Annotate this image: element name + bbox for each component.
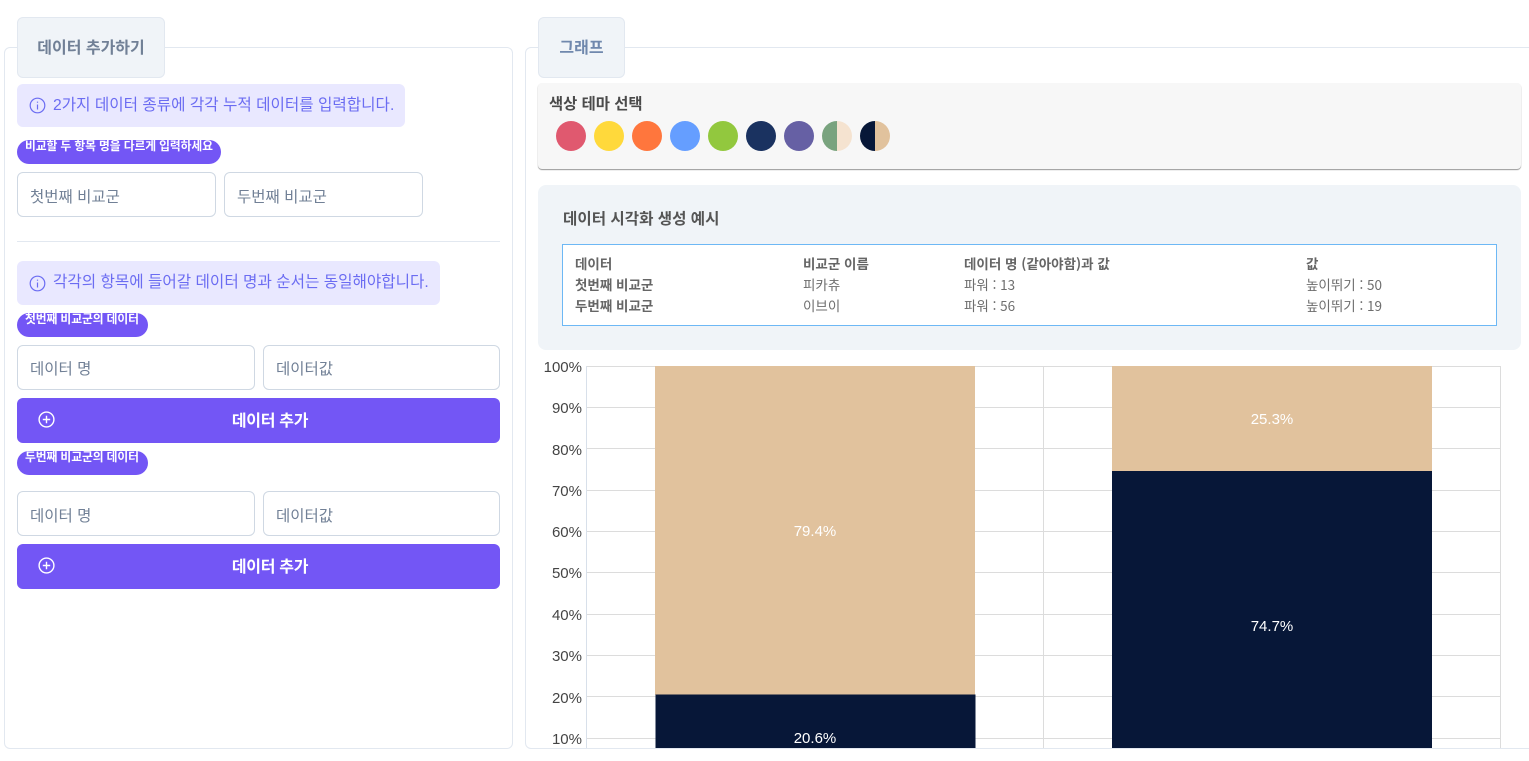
data one column: 파워 : 56	[964, 294, 1015, 314]
data two column	[1306, 252, 1382, 314]
y axis labels: 90%	[552, 400, 582, 417]
swatch: yellow	[594, 121, 624, 151]
group names column: 비교군 이름	[803, 252, 869, 272]
button: add first data	[17, 398, 500, 443]
input: first data name: 데이터 명	[30, 361, 91, 378]
swatch: green and cream	[822, 121, 852, 151]
swatch: green	[708, 121, 738, 151]
swatch: blue	[670, 121, 700, 151]
y axis labels: 100%	[544, 359, 582, 376]
button: add first data: 데이터 추가	[232, 413, 308, 430]
group names column: 피카츄	[803, 274, 840, 294]
button: add second data	[17, 544, 500, 589]
y axis labels: 40%	[552, 607, 582, 624]
swatch: red	[556, 121, 586, 151]
input: first data value	[263, 345, 500, 390]
swatch: purple	[784, 121, 814, 151]
y axis labels: 20%	[552, 690, 582, 707]
data two column: 값	[1306, 252, 1318, 272]
tab heading: graph	[538, 17, 625, 78]
swatch: orange	[632, 121, 662, 151]
row labels column: 첫번째 비교군	[575, 274, 653, 294]
input: second data name: 데이터 명	[30, 508, 91, 525]
swatch: navy	[746, 121, 776, 151]
data one column: 데이터 명 (같아야함)과 값	[964, 252, 1110, 272]
panel: graph	[525, 47, 1529, 749]
data two column: 높이뛰기 : 19	[1306, 294, 1382, 314]
panel: add data	[4, 47, 513, 749]
y axis labels	[544, 359, 582, 748]
y axis labels: 30%	[552, 648, 582, 665]
y axis labels: 70%	[552, 483, 582, 500]
info alert: enter stacked data	[17, 84, 405, 127]
bar: second group: 25.3%	[1251, 411, 1293, 428]
input: first data name	[17, 345, 255, 390]
row labels column	[575, 252, 653, 314]
tab heading: add data	[17, 17, 165, 78]
input: first group: 첫번째 비교군	[30, 189, 120, 206]
input: first group	[17, 172, 216, 217]
info alert: same data order	[17, 261, 440, 305]
bar: first group: 79.4%	[794, 523, 836, 540]
swatch: dark navy and tan	[860, 121, 890, 151]
tab heading: graph: 그래프	[559, 40, 604, 57]
info alert: same data order: 각각의 항목에 들어갈 데이터 명과 순서는 동일해야합니다.	[53, 274, 429, 291]
input: first data value: 데이터값	[276, 361, 333, 378]
y axis labels: 50%	[552, 565, 582, 582]
group names column: 이브이	[803, 294, 840, 314]
heading: example: 데이터 시각화 생성 예시	[563, 211, 719, 228]
badge: first group data	[17, 313, 148, 337]
tab heading: add data: 데이터 추가하기	[37, 40, 145, 57]
panel: data visualization example	[538, 185, 1521, 350]
input: second data name	[17, 491, 255, 536]
chart: stacked 100 percent bars	[544, 359, 1501, 748]
data two column: 높이뛰기 : 50	[1306, 274, 1382, 294]
table: example data	[562, 244, 1497, 326]
input: second data value	[263, 491, 500, 536]
bar: first group	[655, 366, 976, 748]
data one column	[964, 252, 1110, 314]
bar: second group	[1112, 366, 1432, 748]
bar: second group: 74.7%	[1251, 618, 1293, 635]
input: second group	[224, 172, 423, 217]
input: second data value: 데이터값	[276, 508, 333, 525]
row labels column: 데이터	[575, 252, 612, 272]
heading: color theme: 색상 테마 선택	[549, 96, 643, 113]
y axis labels: 10%	[552, 731, 582, 748]
button: add second data: 데이터 추가	[232, 559, 308, 576]
y axis labels: 60%	[552, 524, 582, 541]
y axis labels: 80%	[552, 442, 582, 459]
bar: first group: 20.6%	[794, 730, 836, 747]
input: second group: 두번째 비교군	[237, 189, 327, 206]
data one column: 파워 : 13	[964, 274, 1015, 294]
group names column	[803, 252, 869, 314]
badge: comparison names	[17, 140, 221, 164]
badge: second group data	[17, 451, 148, 475]
panel: color theme selection	[538, 83, 1521, 169]
info alert: enter stacked data: 2가지 데이터 종류에 각각 누적 데이터를 입력합니다.	[53, 96, 394, 114]
row labels column: 두번째 비교군	[575, 294, 653, 314]
